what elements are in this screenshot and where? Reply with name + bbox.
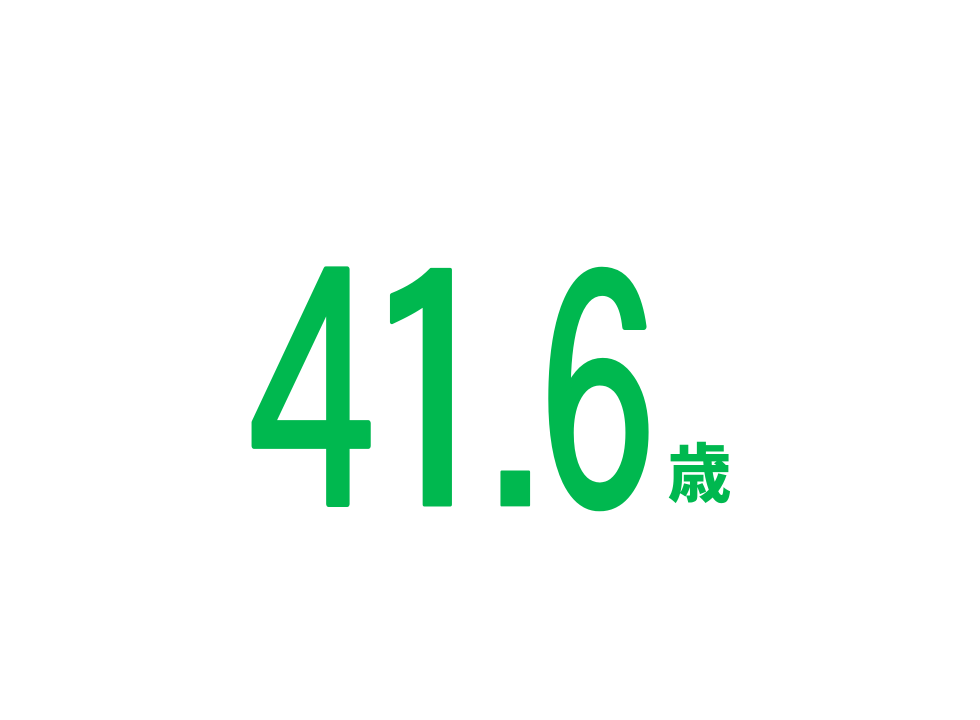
unit: 歳: 歳: [668, 439, 732, 511]
number: 41.6: 6: [539, 235, 657, 557]
number: 41.6: [248, 226, 657, 562]
number: 41.6: 4: [248, 226, 375, 562]
number: 41.6: 1: [355, 226, 511, 562]
number: 41.6: .: [483, 288, 585, 535]
